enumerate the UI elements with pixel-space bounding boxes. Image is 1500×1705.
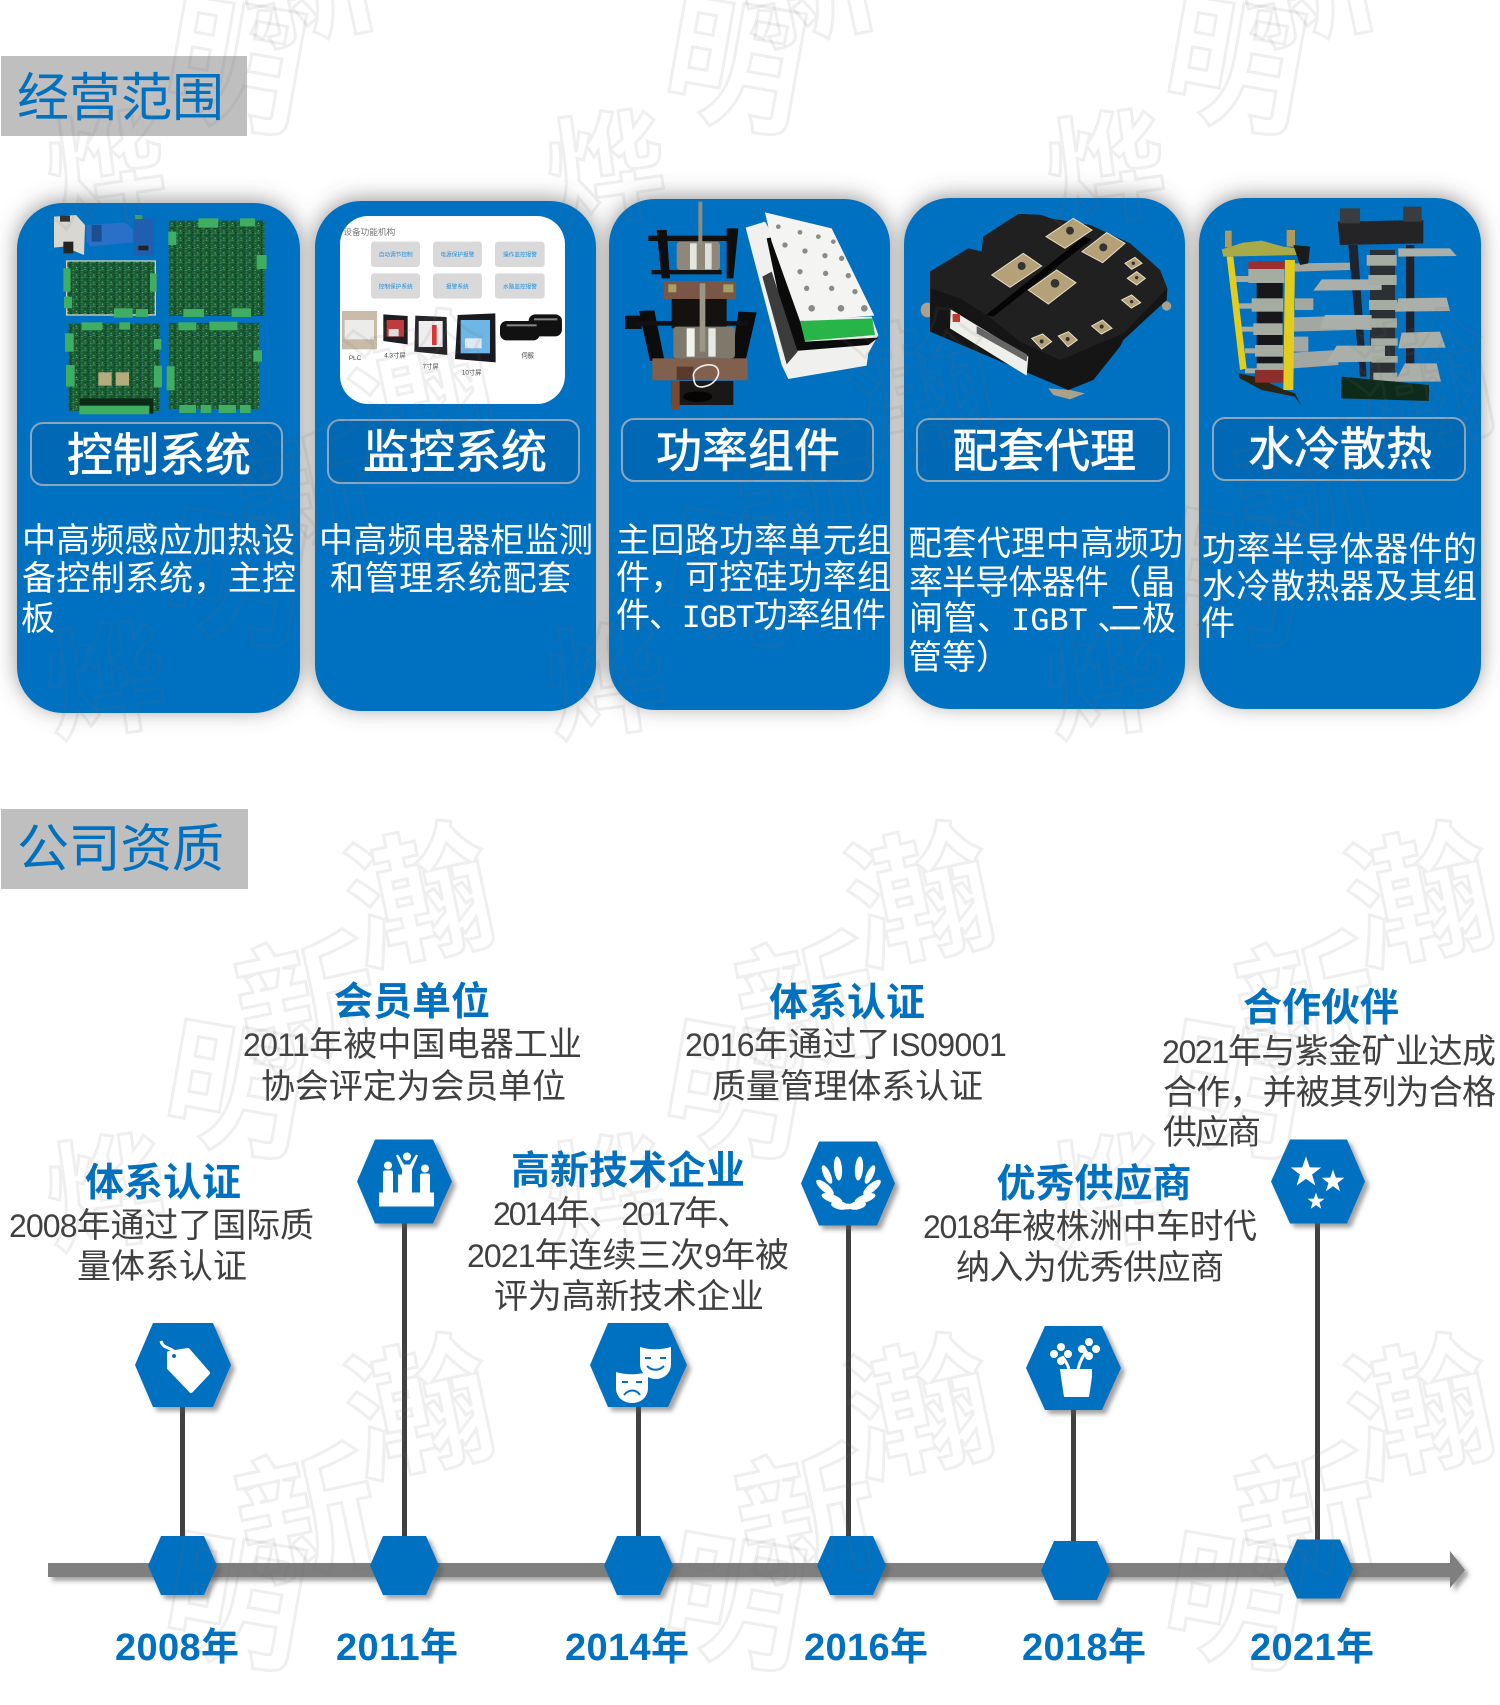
text: description bbox=[616, 522, 891, 637]
image: monitoring screens: 控制保护系统 bbox=[379, 282, 413, 290]
heading: 经营范围 bbox=[1, 56, 247, 136]
text: description: 板 bbox=[21, 600, 55, 638]
text: 2008 description bbox=[9, 1207, 314, 1286]
year: 2014年: 2014年 bbox=[565, 1627, 689, 1669]
milestone 2016 bbox=[685, 982, 1006, 1669]
label: 功率组件: 功率组件 bbox=[656, 425, 840, 477]
image: monitoring screens: 10寸屏 bbox=[462, 367, 482, 376]
heading: 体系认证: 体系认证 bbox=[85, 1162, 241, 1205]
label: 配套代理 bbox=[917, 419, 1169, 481]
text: 明 bbox=[150, 968, 323, 1192]
text: 新 bbox=[1216, 882, 1395, 1109]
text: 2008 description: 量体系认证 bbox=[77, 1248, 247, 1286]
panel: 控制系统 bbox=[17, 203, 300, 713]
year: 2011年: 2011年 bbox=[336, 1627, 458, 1669]
label: 监控系统 bbox=[328, 420, 579, 483]
year: 2008年: 2008年 bbox=[115, 1627, 239, 1669]
text: description: 二极 bbox=[1108, 600, 1176, 638]
text: 2016 description: 2016年通过了IS09001 bbox=[685, 1026, 1006, 1064]
heading: 优秀供应商: 优秀供应商 bbox=[996, 1163, 1192, 1206]
text: 瀚 bbox=[825, 257, 1011, 492]
label: 水冷散热 bbox=[1213, 418, 1465, 480]
text: 明 bbox=[1150, 1480, 1323, 1704]
text: description: 备控制系统，主控 bbox=[22, 560, 296, 598]
image: monitoring screens bbox=[340, 216, 565, 404]
heading: 公司资质: 公司资质 bbox=[17, 821, 224, 879]
icon: three stars bbox=[1291, 1156, 1344, 1209]
text: 烨 bbox=[33, 66, 176, 255]
icon: laurel wreath bbox=[814, 1156, 883, 1211]
text: description: 管等） bbox=[908, 639, 1010, 677]
text: description bbox=[319, 522, 593, 598]
text: 烨 bbox=[533, 578, 676, 767]
milestone 2018 bbox=[923, 1163, 1257, 1669]
image: monitoring screens: 电源保护报警 bbox=[440, 250, 475, 258]
image: water cooling heatsinks bbox=[1222, 207, 1457, 407]
text: 2011 description: 2011年被中国电器工业 bbox=[243, 1026, 582, 1064]
label: 控制系统 bbox=[31, 423, 282, 485]
heading: 会员单位: 会员单位 bbox=[334, 981, 490, 1024]
heading: 高新技术企业: 高新技术企业 bbox=[511, 1150, 745, 1193]
image: monitoring screens: 操作监控报警 bbox=[503, 250, 537, 258]
text: 2021 description: 供应商 bbox=[1163, 1114, 1261, 1152]
milestone 2011 bbox=[243, 981, 582, 1669]
text: 明 bbox=[1150, 456, 1323, 680]
text: 瀚 bbox=[325, 257, 511, 492]
text: 新 bbox=[216, 882, 395, 1109]
year: 2021年: 2021年 bbox=[1250, 1627, 1374, 1669]
text: description bbox=[1201, 531, 1477, 643]
image: power assemblies bbox=[625, 202, 878, 409]
heading: 合作伙伴: 合作伙伴 bbox=[1243, 987, 1399, 1030]
text: 2014 description: 2021年连续三次9年被 bbox=[467, 1237, 789, 1275]
text: 新 bbox=[1216, 1394, 1395, 1621]
text: 2016 description: 质量管理体系认证 bbox=[712, 1068, 983, 1106]
text: 2021 description bbox=[1162, 1033, 1496, 1152]
year: 2016年: 2016年 bbox=[804, 1627, 928, 1669]
image: monitoring screens: 伺服 bbox=[521, 352, 535, 360]
milestone 2021 bbox=[1162, 987, 1496, 1669]
text: 新 bbox=[716, 1394, 895, 1621]
text: 2016 description bbox=[685, 1026, 1006, 1106]
text: 明 bbox=[150, 1480, 323, 1704]
text: 瀚 bbox=[825, 769, 1011, 1004]
label: 功率组件 bbox=[622, 419, 873, 481]
panel: 功率组件 bbox=[609, 199, 891, 710]
text: 2014 description: 评为高新技术企业 bbox=[494, 1278, 764, 1316]
label: 控制系统: 控制系统 bbox=[67, 429, 251, 481]
text: 新 bbox=[216, 370, 395, 597]
text: 新 bbox=[716, 882, 895, 1109]
text: description: 中高频感应加热设 bbox=[22, 522, 295, 560]
heading: 公司资质 bbox=[1, 809, 248, 889]
text: 2008 description: 2008年通过了国际质 bbox=[9, 1207, 314, 1245]
image: monitoring screens: 设备功能机构 bbox=[343, 226, 396, 237]
panel: 水冷散热 bbox=[1199, 198, 1481, 709]
text: 烨 bbox=[33, 1090, 176, 1279]
icon: price tag bbox=[161, 1341, 208, 1391]
text: 2018 description: 2018年被株洲中车时代 bbox=[923, 1208, 1257, 1246]
text: description bbox=[21, 522, 296, 638]
text: 2014 description: 2014年、2017年、 bbox=[493, 1195, 751, 1233]
text: 新 bbox=[216, 1394, 395, 1621]
text: 明 bbox=[650, 1480, 823, 1704]
text: 烨 bbox=[1033, 578, 1176, 767]
panel: 监控系统 bbox=[315, 201, 596, 711]
text: 瀚 bbox=[325, 1281, 511, 1516]
label: 监控系统: 监控系统 bbox=[363, 426, 547, 478]
image: monitoring screens: 7寸屏 bbox=[423, 361, 439, 370]
text: description: 主回路功率单元组 bbox=[616, 522, 891, 560]
text: 新 bbox=[1216, 370, 1395, 597]
text: 明 bbox=[150, 456, 323, 680]
image: monitoring screens: 报警系统 bbox=[446, 282, 469, 290]
text: description bbox=[908, 525, 1183, 677]
image: monitoring screens: 水路监控报警 bbox=[503, 282, 537, 290]
text: description: 件 bbox=[1201, 605, 1235, 643]
text: description: 率半导体器件（晶 bbox=[909, 564, 1175, 602]
text: 明 bbox=[1150, 968, 1323, 1192]
text: description: 件、IGBT功率组件 bbox=[616, 597, 886, 637]
text: 2018 description bbox=[923, 1208, 1257, 1287]
text: 烨 bbox=[533, 66, 676, 255]
text: 明 bbox=[650, 968, 823, 1192]
text: 2018 description: 纳入为优秀供应商 bbox=[956, 1249, 1224, 1287]
image: control boards bbox=[54, 215, 267, 414]
text: 烨 bbox=[533, 1090, 676, 1279]
heading: 体系认证: 体系认证 bbox=[769, 982, 925, 1025]
timeline axis with arrow bbox=[48, 1551, 1465, 1588]
milestone 2014 bbox=[467, 1150, 789, 1669]
text: description: 功率半导体器件的 bbox=[1202, 531, 1477, 569]
text: description: 中高频电器柜监测 bbox=[319, 522, 593, 560]
text: 烨 bbox=[1033, 1090, 1176, 1279]
image: monitoring screens: 自动调节控制 bbox=[379, 250, 413, 258]
text: description: 水冷散热器及其组 bbox=[1202, 568, 1477, 606]
image: IGBT module bbox=[921, 214, 1171, 399]
label: 配套代理: 配套代理 bbox=[952, 425, 1136, 477]
text: description: 和管理系统配套 bbox=[330, 560, 571, 598]
text: description: 件，可控硅功率组 bbox=[616, 559, 891, 597]
text: 2021 description: 2021年与紫金矿业达成 bbox=[1162, 1033, 1496, 1071]
text: 2011 description bbox=[243, 1026, 582, 1106]
text: 2011 description: 协会评定为会员单位 bbox=[261, 1068, 566, 1106]
icon: theatre masks bbox=[616, 1347, 671, 1403]
year: 2018年: 2018年 bbox=[1022, 1627, 1146, 1669]
text: 新 bbox=[716, 370, 895, 597]
label: 水冷散热: 水冷散热 bbox=[1248, 423, 1432, 475]
text: 2014 description bbox=[467, 1195, 789, 1316]
panel: 配套代理 bbox=[904, 198, 1185, 709]
text: 瀚 bbox=[825, 1281, 1011, 1516]
text: 2021 description: 合作，并被其列为合格 bbox=[1163, 1074, 1496, 1112]
text: description: 配套代理中高频功 bbox=[908, 525, 1183, 563]
text: 烨 bbox=[33, 578, 176, 767]
text: 明 bbox=[650, 456, 823, 680]
text: 烨 bbox=[1033, 66, 1176, 255]
image: monitoring screens: PLC bbox=[349, 355, 362, 362]
heading: 经营范围: 经营范围 bbox=[17, 70, 224, 128]
text: description: 闸管、IGBT 、 bbox=[909, 600, 1131, 640]
icon: podium figures bbox=[379, 1152, 434, 1206]
image: monitoring screens: 4.3寸屏 bbox=[384, 351, 406, 360]
text: 瀚 bbox=[325, 769, 511, 1004]
milestone 2008 bbox=[9, 1162, 314, 1669]
icon: flower pot bbox=[1050, 1338, 1100, 1397]
